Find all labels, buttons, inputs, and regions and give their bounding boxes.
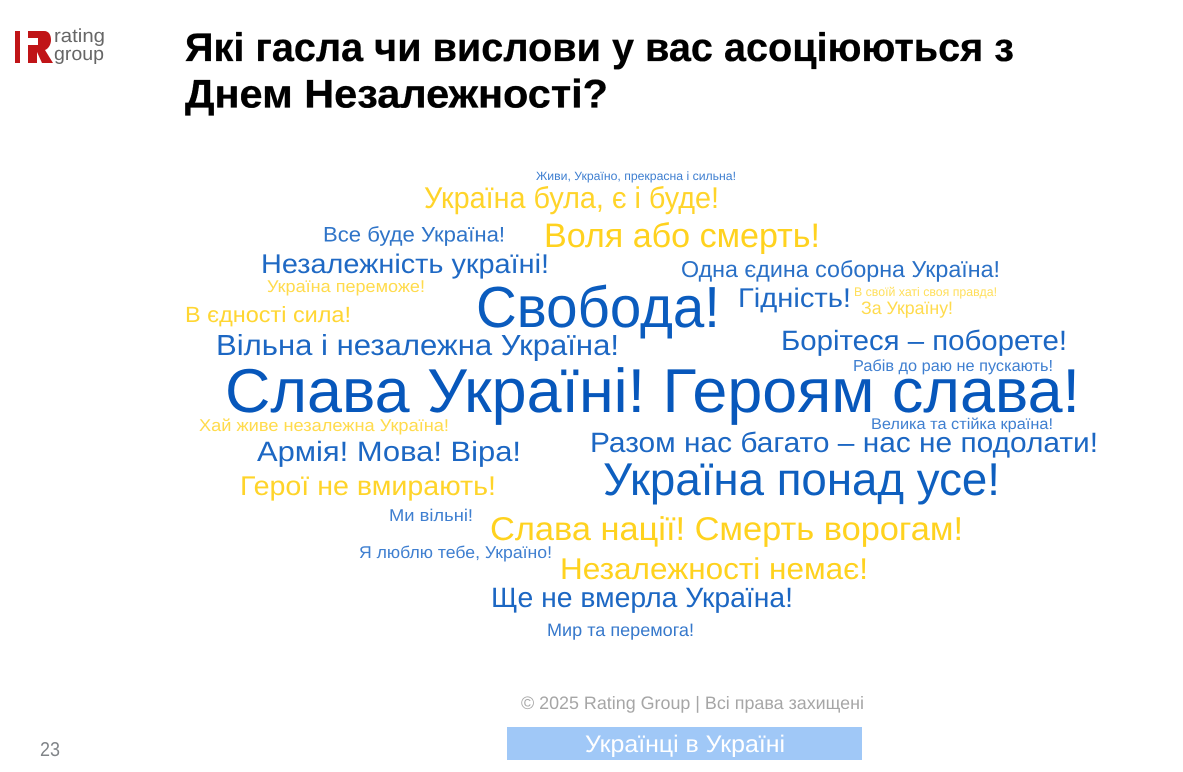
phrase: Живи, Україно, прекрасна і сильна! xyxy=(536,169,736,183)
phrase: В своїй хаті своя правда! xyxy=(854,285,997,299)
phrase: Україна понад усе! xyxy=(603,453,1000,505)
phrase: Борітеся – поборете! xyxy=(781,325,1067,356)
phrase: Слава Україні! Героям слава! xyxy=(225,357,1080,426)
footer banner xyxy=(507,727,862,760)
title: Днем Незалежності? xyxy=(185,72,608,116)
page number: 23 xyxy=(40,739,60,761)
phrase: Разом нас багато – нас не подолати! xyxy=(590,427,1098,458)
logo: Rating Group xyxy=(15,26,105,65)
title: Які гасла чи вислови у вас асоціюються з xyxy=(185,26,1014,70)
logo wordmark: group xyxy=(54,44,104,65)
phrase: Гідність! xyxy=(738,283,851,313)
title xyxy=(185,26,1014,116)
logo wordmark: rating xyxy=(54,26,105,47)
phrase: Мир та перемога! xyxy=(547,620,694,640)
phrase: В єдності сила! xyxy=(185,302,351,327)
phrase: За Україну! xyxy=(861,298,953,318)
phrase: Армія! Мова! Віра! xyxy=(257,436,521,467)
word cloud xyxy=(185,169,1098,640)
phrase: Ми вільні! xyxy=(389,506,473,525)
logo wordmark xyxy=(54,26,105,65)
phrase: Воля або смерть! xyxy=(544,217,820,255)
phrase: Хай живе незалежна Україна! xyxy=(199,416,449,435)
phrase: Слава нації! Смерть ворогам! xyxy=(490,510,963,547)
phrase: Я люблю тебе, Україно! xyxy=(359,543,552,562)
footer banner: Українці в Україні xyxy=(585,731,785,758)
phrase: Ще не вмерла Україна! xyxy=(491,582,793,613)
phrase: Україна була, є і буде! xyxy=(424,182,719,215)
logo mark: red R xyxy=(15,31,53,63)
phrase: Свобода! xyxy=(476,275,720,340)
phrase: Рабів до раю не пускають! xyxy=(853,358,1053,375)
phrase: Одна єдина соборна Україна! xyxy=(681,256,1000,282)
copyright: © 2025 Rating Group | Всі права захищені xyxy=(521,693,864,713)
phrase: Все буде Україна! xyxy=(323,224,505,246)
phrase: Незалежність україні! xyxy=(261,249,549,279)
phrase: Україна переможе! xyxy=(267,277,425,296)
phrase: Вільна і незалежна Україна! xyxy=(216,330,619,362)
phrase: Велика та стійка країна! xyxy=(871,416,1053,433)
phrase: Незалежності немає! xyxy=(560,553,868,586)
phrase: Герої не вмирають! xyxy=(240,471,496,501)
